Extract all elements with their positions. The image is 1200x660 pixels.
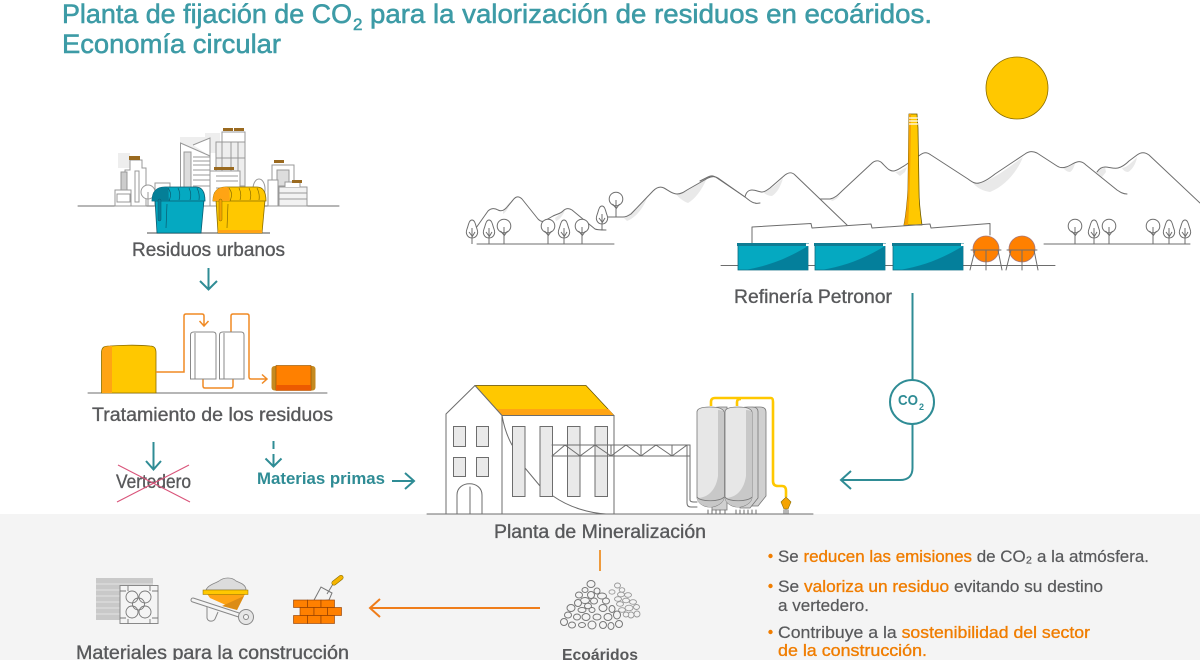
illustration: treatment bbox=[88, 314, 327, 393]
illustration: mineralization plant bbox=[427, 386, 813, 514]
bullet 2 bbox=[768, 577, 1103, 615]
icon: teal container bbox=[155, 200, 204, 233]
illustration: urban waste bbox=[78, 128, 339, 233]
bullet 2: a vertedero. bbox=[778, 596, 869, 615]
label: treatment: Tratamiento de los residuos bbox=[92, 405, 333, 426]
bullet 1: Se reducen las emisiones de CO₂ a la atmósfera. bbox=[778, 547, 1149, 566]
arrow: aggregates to materials bbox=[370, 599, 540, 617]
arrow: raw materials to plant bbox=[392, 473, 414, 489]
title: Economía circular bbox=[62, 29, 281, 59]
label: plant: Planta de Mineralización bbox=[494, 522, 706, 543]
icon: wheelbarrow bbox=[193, 578, 254, 624]
text block: benefits bbox=[768, 547, 1149, 660]
title: 2 bbox=[353, 15, 362, 34]
bullet 3: de la construcción. bbox=[778, 641, 927, 660]
title bbox=[62, 0, 932, 59]
arrow: to raw materials bbox=[266, 441, 282, 466]
icon: sun bbox=[986, 57, 1048, 119]
icon: bricks and trowel bbox=[294, 578, 342, 624]
arrow: plant to aggregates bbox=[599, 550, 601, 571]
mountains and trees landscape bbox=[466, 152, 1200, 244]
chimney bbox=[904, 114, 922, 225]
icon: tile bbox=[96, 578, 158, 624]
arrow: CO2 flow: 2 bbox=[919, 402, 924, 412]
icon: yellow container bbox=[216, 200, 265, 233]
silos bbox=[712, 407, 766, 510]
bullet 3 bbox=[768, 623, 1090, 660]
label: raw materials: Materias primas bbox=[257, 470, 385, 488]
arrow: waste to treatment bbox=[200, 268, 217, 290]
grey bottom band bbox=[0, 514, 1200, 660]
icon: aggregates pile bbox=[560, 580, 640, 630]
label: landfill crossed out: Vertedero bbox=[116, 472, 191, 493]
label: refinery: Refinería Petronor bbox=[734, 287, 893, 308]
label: landfill crossed out bbox=[116, 465, 191, 502]
arrow: CO2 flow: CO bbox=[898, 392, 918, 409]
buildings bbox=[115, 132, 307, 206]
bullet 3: Contribuye a la sostenibilidad del sector bbox=[778, 623, 1090, 642]
label: urban waste: Residuos urbanos bbox=[132, 240, 285, 261]
arrow: CO2 flow bbox=[841, 293, 934, 489]
arrow: to landfill bbox=[146, 442, 161, 470]
bullet 2: Se valoriza un residuo evitando su destino bbox=[778, 577, 1103, 596]
illustration: refinery bbox=[721, 114, 1055, 270]
